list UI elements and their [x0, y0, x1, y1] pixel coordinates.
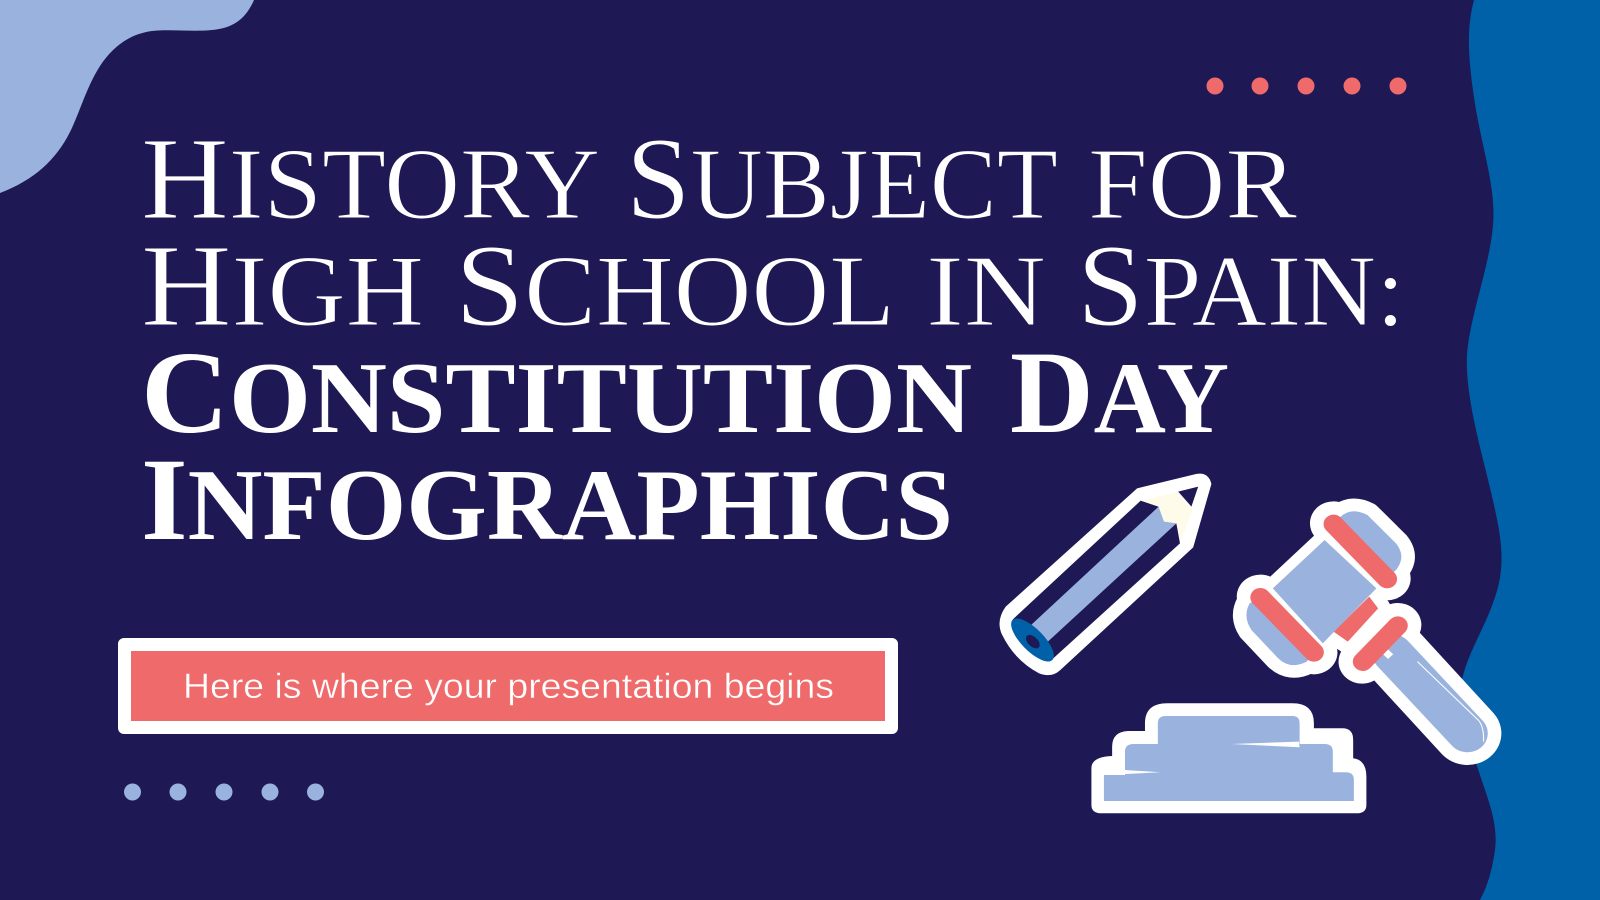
icon: pencil: [1000, 474, 1211, 675]
title: DAY: [1010, 327, 1229, 458]
title: IN: [926, 235, 1046, 348]
title: SUBJECT: [626, 113, 1058, 244]
title: [141, 113, 1405, 565]
subtitle text: Here is where your presentation begins: [183, 667, 834, 706]
dots: top right coral: [1206, 78, 1406, 94]
title: CONSTITUTION: [141, 327, 972, 458]
title: HISTORY: [141, 113, 600, 244]
title: SCHOOL: [455, 220, 895, 351]
title: FOR: [1088, 128, 1297, 241]
icon: sound block: [1091, 703, 1366, 813]
icon: gavel: [1246, 511, 1484, 742]
title: SPAIN:: [1077, 220, 1405, 351]
wave: right edge band: [1461, 0, 1600, 900]
blob: top-left corner: [0, 0, 254, 193]
title: HIGH: [141, 220, 424, 351]
subtitle box: [118, 638, 898, 734]
title: INFOGRAPHICS: [141, 434, 953, 565]
gavel head: [1246, 511, 1401, 665]
dots: bottom left blue: [124, 784, 324, 800]
